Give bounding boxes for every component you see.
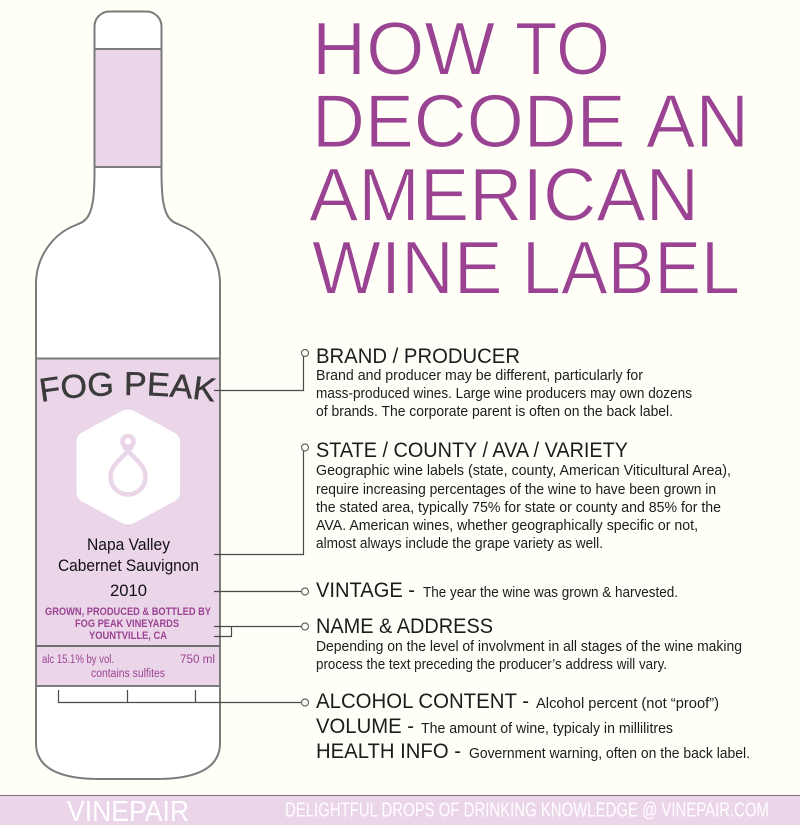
section: vintage — [316, 579, 678, 602]
connector dots — [302, 350, 308, 706]
section: state / county / AVA / variety — [316, 439, 731, 552]
title: WINE — [312, 226, 502, 310]
description — [316, 368, 692, 420]
description: Depending on the level of involvment in all stages of the wine making — [316, 639, 742, 655]
description: The amount of wine, typicaly in millilitres — [421, 721, 673, 737]
hexagon logo — [76, 410, 180, 524]
description — [316, 639, 742, 673]
sulfites text: contains sulfites — [91, 668, 165, 680]
section: volume — [316, 715, 673, 738]
lower label divider — [36, 645, 220, 647]
section: brand / producer — [316, 345, 692, 420]
heading: NAME & ADDRESS — [316, 615, 493, 638]
volume text: 750 ml — [180, 654, 215, 666]
description: The year the wine was grown & harvested. — [423, 585, 678, 601]
section: alcohol content — [316, 690, 719, 713]
title: TO — [515, 6, 610, 90]
hexagon — [76, 410, 180, 524]
description — [316, 463, 731, 552]
description: mass-produced wines. Large wine producers may own dozens — [316, 386, 692, 402]
description: require increasing percentages of the wine to have been grown in — [316, 482, 716, 498]
region text: Napa Valley — [87, 535, 170, 554]
title: LABEL — [522, 226, 740, 310]
winery address: YOUNTVILLE, CA — [89, 630, 167, 642]
heading: VINTAGE - — [316, 579, 415, 602]
section: health info — [316, 740, 750, 763]
description: Brand and producer may be different, particularly for — [316, 368, 643, 384]
description: process the text preceding the producer’s address will vary. — [316, 657, 667, 673]
section: name and address — [316, 615, 742, 673]
description: the stated area, typically 75% for state or county and 85% for the — [316, 500, 721, 516]
title: AMERICAN — [309, 152, 699, 236]
heading: VOLUME - — [316, 715, 414, 738]
description: AVA. American wines, whether geographically specific or not, — [316, 518, 698, 534]
connector lines — [58, 350, 308, 706]
region connector — [214, 451, 304, 554]
label panel — [36, 358, 220, 686]
title — [309, 6, 749, 310]
variety text: Cabernet Sauvignon — [58, 556, 199, 575]
alcohol text: alc 15.1% by vol. — [42, 654, 114, 666]
brand connector — [214, 356, 304, 390]
title: HOW — [312, 6, 495, 90]
title: DECODE — [312, 79, 626, 163]
footer top rule — [0, 794, 800, 796]
description: of brands. The corporate parent is often on the back label. — [316, 404, 673, 420]
description: Government warning, often on the back label. — [469, 746, 750, 762]
neck foil band — [94, 49, 162, 167]
title: AN — [646, 79, 749, 163]
brand name on label: FOG PEAK — [40, 372, 216, 402]
bottle outline — [36, 11, 220, 779]
vintage connector — [214, 590, 301, 592]
bottler statement: GROWN, PRODUCED & BOTTLED BY — [45, 606, 212, 618]
heading: BRAND / PRODUCER — [316, 345, 520, 368]
drop loop symbol — [110, 436, 146, 494]
description: Alcohol percent (not “proof”) — [536, 696, 719, 712]
footer background — [0, 796, 800, 825]
footer bar — [0, 796, 800, 825]
description: Geographic wine labels (state, county, American Viticultural Area), — [316, 463, 731, 479]
wine bottle illustration — [35, 10, 221, 780]
alcohol connector — [58, 690, 301, 702]
heading: ALCOHOL CONTENT - — [316, 690, 529, 713]
heading: STATE / COUNTY / AVA / VARIETY — [316, 439, 628, 462]
vintage text: 2010 — [110, 581, 147, 600]
name and address connector — [214, 626, 301, 636]
description: almost always include the grape variety as well. — [316, 536, 603, 552]
winery name: FOG PEAK VINEYARDS — [75, 618, 179, 630]
heading: HEALTH INFO - — [316, 740, 461, 763]
